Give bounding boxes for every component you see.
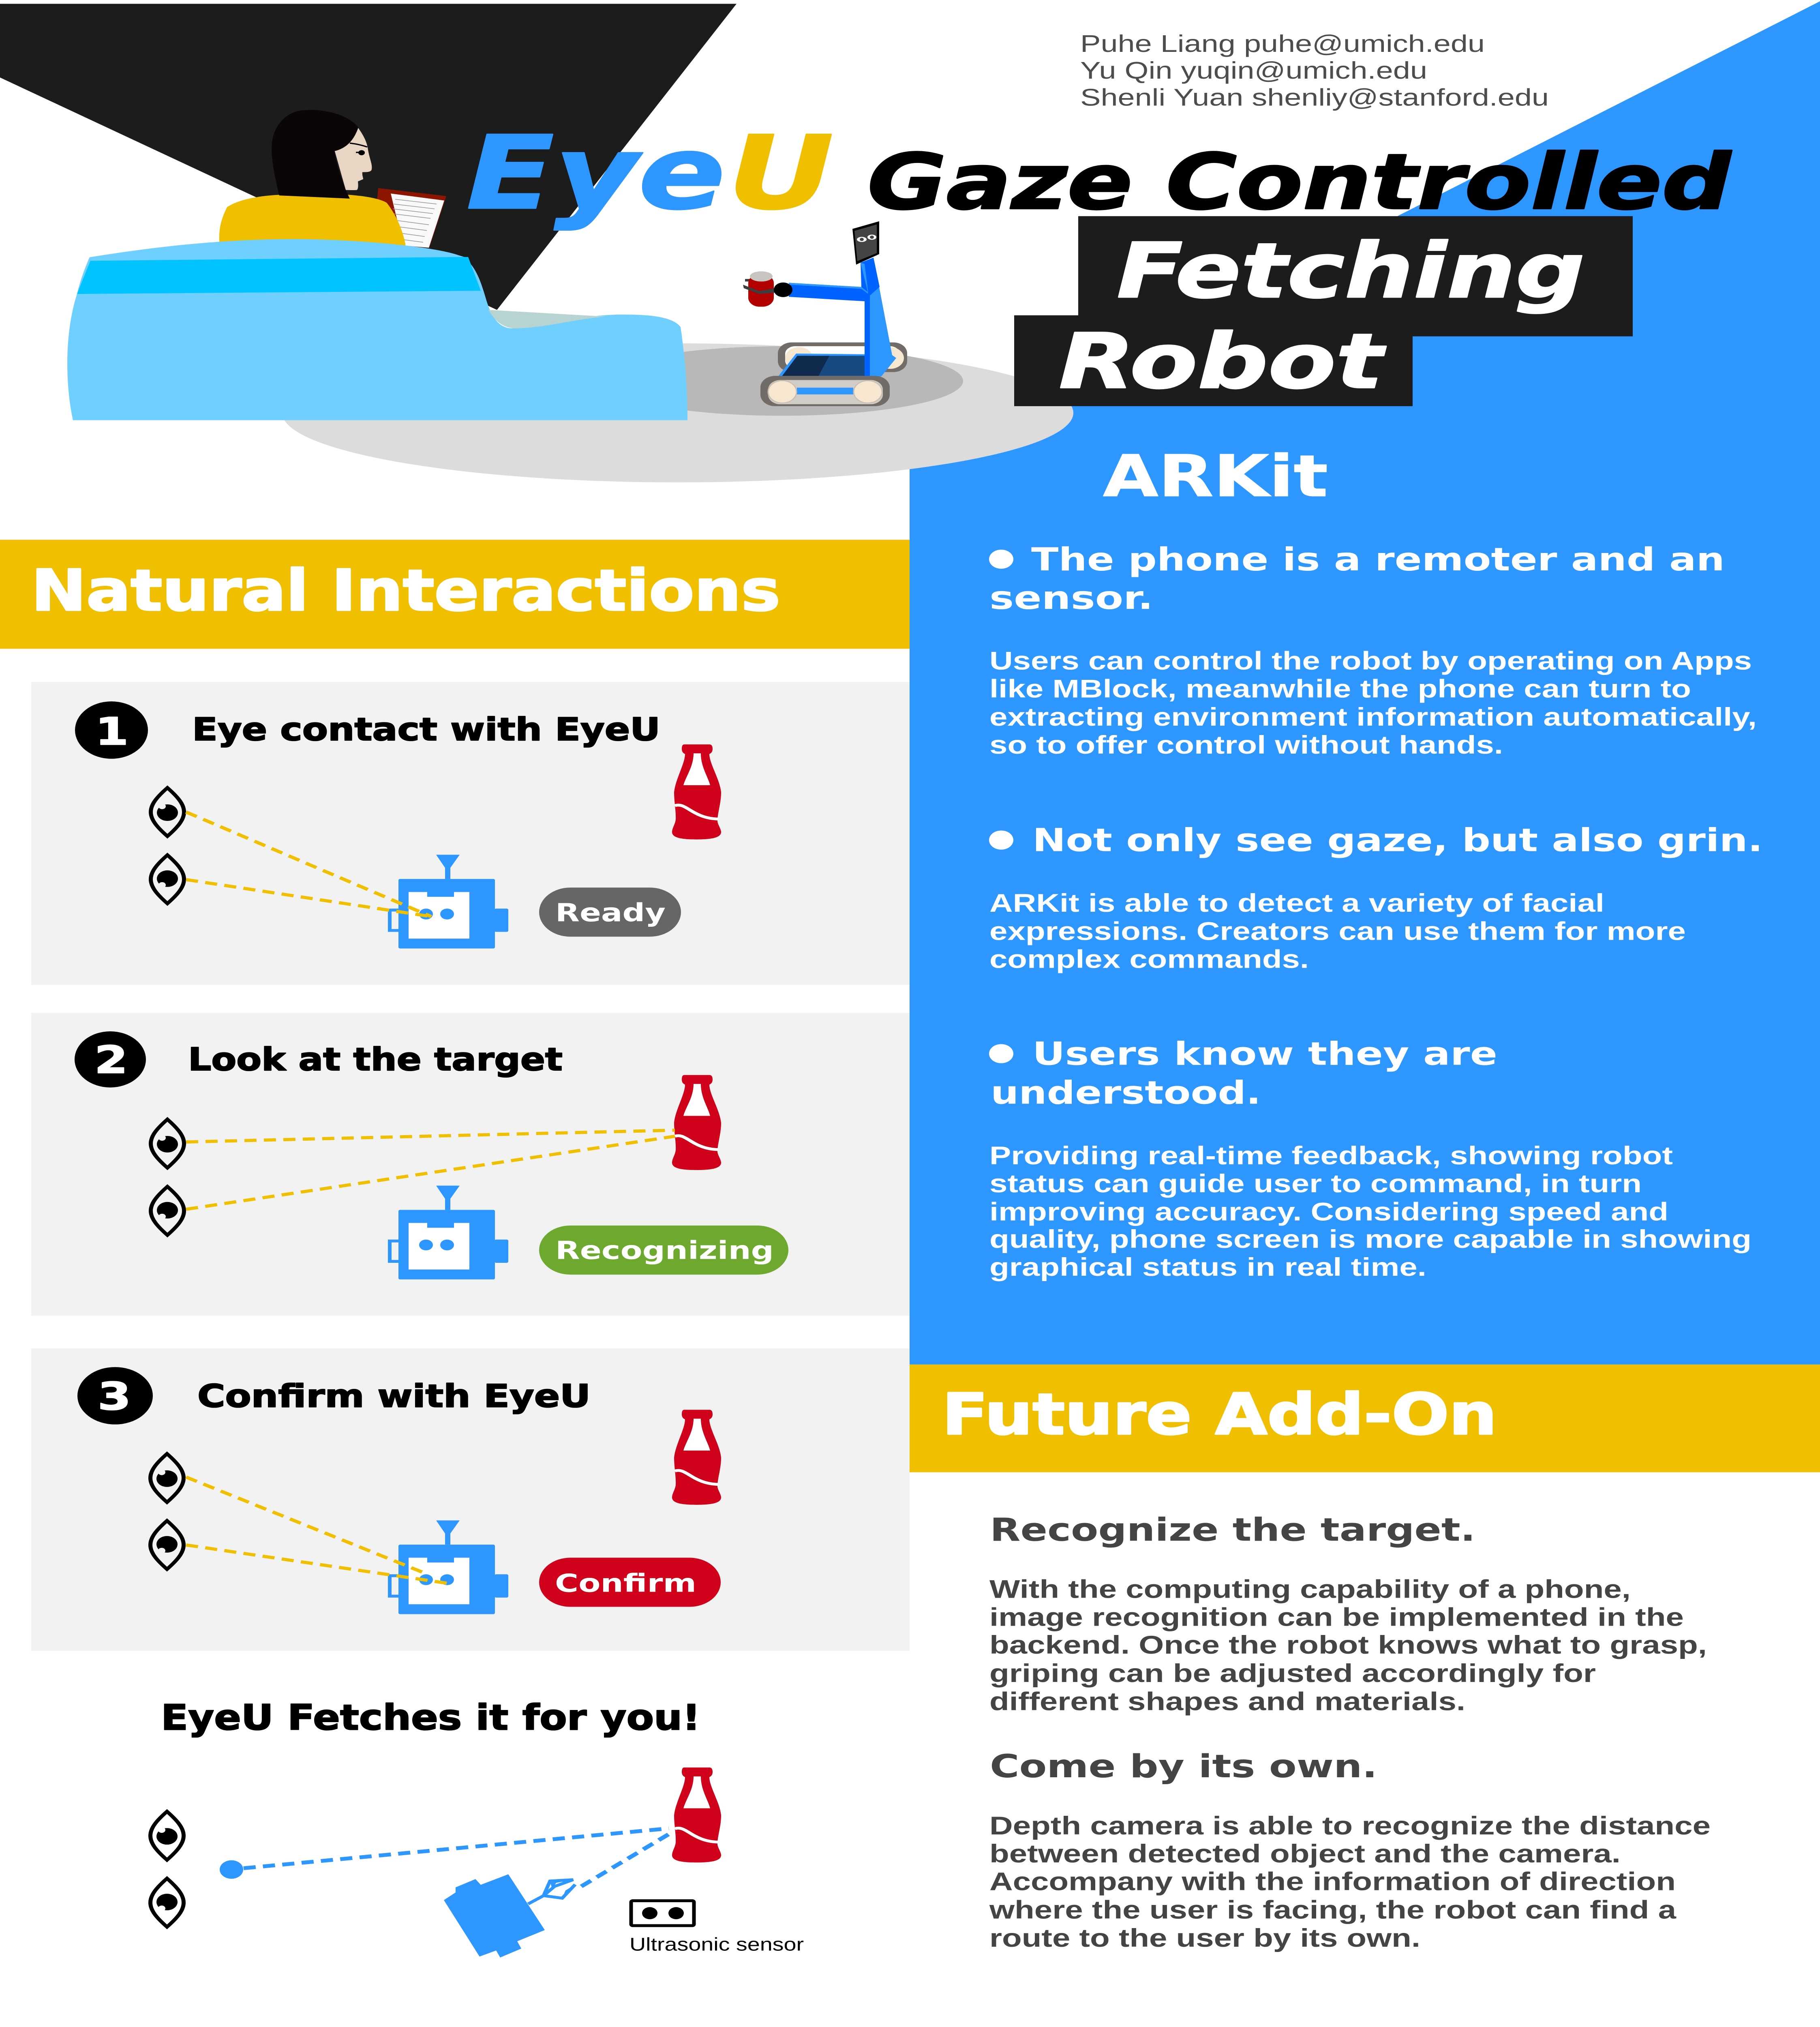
icon: bottle (672, 744, 721, 840)
step number 2 (75, 1031, 146, 1087)
icon: eyes (151, 1119, 184, 1235)
block: come by its own (989, 1748, 1711, 1952)
heading: Future Add-On: Future Add-On (942, 1381, 1497, 1447)
background: blue ARKit panel (910, 1, 1820, 1365)
authors (1080, 30, 1549, 111)
book (373, 188, 446, 248)
tray (778, 354, 865, 376)
step number 3: 3 (98, 1375, 131, 1418)
block: users understood (989, 1036, 1751, 1281)
status pill: Ready (539, 887, 681, 936)
fetch heading: EyeU Fetches it for you! (161, 1697, 700, 1738)
heading: ARKit: ARKit (1103, 443, 1328, 510)
sofa stripe (77, 257, 481, 294)
icon: ultrasonic sensor (631, 1901, 694, 1926)
block: recognize the target: Recognize the target. (990, 1512, 1475, 1549)
block: come by its own: Come by its own. (990, 1748, 1377, 1785)
block: recognize the target (989, 1512, 1707, 1716)
block: remoter and sensor: like MBlock, meanwhile the phone can turn to (989, 675, 1691, 703)
panel: step 3 (31, 1348, 910, 1651)
step number 2: 2 (94, 1038, 128, 1082)
title: Eye (466, 114, 726, 232)
icon: rotated robot (444, 1874, 575, 1958)
block: recognize the target: With the computing capability of a phone, (989, 1575, 1631, 1603)
block: come by its own: route to the user by its own. (989, 1924, 1420, 1952)
icon: robot head (388, 1186, 508, 1279)
gaze lines (186, 1130, 675, 1209)
step number 1 (75, 701, 148, 759)
block: remoter and sensor: extracting environment information automatically, (989, 703, 1757, 731)
background: black triangle (0, 4, 737, 310)
authors: Puhe Liang puhe@umich.edu (1080, 30, 1485, 57)
robot column and arm (789, 257, 896, 377)
block: remoter and sensor: The phone is a remoter and an (1031, 541, 1725, 578)
icon: eyes (151, 788, 184, 904)
block: recognize the target: backend. Once the robot knows what to grasp, (989, 1631, 1707, 1659)
status pill: Recognizing (539, 1226, 788, 1275)
icon: robot head (388, 1520, 508, 1614)
heading: Natural Interactions: Natural Interactions (31, 557, 780, 624)
sensor label: Ultrasonic sensor (630, 1934, 804, 1955)
block: come by its own: between detected object and the camera. (989, 1840, 1621, 1868)
dashed paths (244, 1828, 669, 1886)
block: users understood: improving accuracy. Considering speed and (989, 1198, 1668, 1226)
block: users understood: Providing real-time feedback, showing robot (989, 1142, 1673, 1170)
authors: Yu Qin yuqin@umich.edu (1080, 57, 1427, 84)
block: users understood: quality, phone screen is more capable in showing (989, 1225, 1751, 1253)
panel: step 2 (31, 1013, 910, 1316)
floor ellipse (282, 343, 1073, 482)
block: come by its own: Depth camera is able to recognize the distance (989, 1812, 1711, 1840)
title: Gaze Controlled (867, 137, 1732, 227)
block: remoter and sensor (989, 541, 1757, 759)
block: gaze and grin: Not only see gaze, but also grin. (1032, 822, 1763, 859)
step number 1: 1 (95, 710, 128, 754)
block: users understood: Users know they are (1032, 1036, 1497, 1073)
sweater (219, 195, 406, 249)
sofa (67, 239, 687, 420)
block: remoter and sensor: sensor. (989, 580, 1153, 617)
block: gaze and grin: expressions. Creators can use them for more (989, 917, 1686, 945)
sofa shadow (488, 310, 606, 328)
title box: Fetching: Fetching (1117, 227, 1585, 315)
block: come by its own: Accompany with the information of direction (989, 1868, 1676, 1896)
icon: eyes (150, 1811, 184, 1927)
status pill: Confirm (539, 1558, 721, 1607)
block: users understood: graphical status in real time. (989, 1253, 1426, 1281)
block: recognize the target: griping can be adjusted accordingly for (989, 1659, 1596, 1688)
block: gaze and grin (989, 822, 1763, 974)
authors: Shenli Yuan shenliy@stanford.edu (1080, 84, 1549, 111)
tablet screen (852, 221, 879, 265)
face (334, 128, 372, 190)
front track (760, 376, 890, 406)
title box: Fetching: Robot (1059, 317, 1386, 406)
block: gaze and grin: ARKit is able to detect a variety of facial (989, 889, 1604, 917)
panel: step 1 (31, 682, 910, 985)
block: users understood: understood. (991, 1075, 1261, 1112)
title (466, 114, 1732, 232)
icon: eyes (150, 1454, 184, 1569)
held can (743, 271, 792, 307)
heading: Future Add-On (910, 1365, 1820, 1472)
block: users understood: status can guide user to command, in turn (989, 1170, 1642, 1198)
step title: Confirm with EyeU (197, 1378, 591, 1415)
status pill: Ready: Ready (555, 898, 666, 928)
illustration: person on sofa (67, 110, 687, 420)
title box: Fetching (1014, 216, 1633, 406)
icon: bottle (672, 1075, 721, 1170)
status pill: Confirm: Confirm (555, 1569, 696, 1598)
gaze lines (186, 812, 431, 917)
robot shadow (602, 346, 963, 416)
section: fetch result (150, 1697, 804, 1958)
icon: robot head (388, 855, 508, 949)
block: come by its own: where the user is facing, the robot can find a (989, 1896, 1677, 1924)
block: remoter and sensor: so to offer control without hands. (989, 731, 1503, 759)
rear track (778, 343, 907, 372)
title: U (728, 114, 834, 232)
block: gaze and grin: complex commands. (989, 945, 1309, 974)
illustration: fetching robot (743, 221, 907, 406)
icon: bottle (672, 1410, 721, 1505)
heading: Natural Interactions (0, 540, 910, 649)
step number 3 (77, 1367, 153, 1425)
status pill: Recognizing: Recognizing (555, 1236, 774, 1265)
block: remoter and sensor: Users can control the robot by operating on Apps (989, 647, 1752, 675)
icon: bottle (672, 1768, 721, 1862)
block: recognize the target: image recognition can be implemented in the (989, 1603, 1684, 1632)
hair (272, 110, 358, 199)
step title: Eye contact with EyeU (192, 711, 660, 748)
step title: Look at the target (188, 1041, 563, 1078)
gaze lines (186, 1477, 447, 1583)
block: recognize the target: different shapes and materials. (989, 1687, 1465, 1716)
gaze point (220, 1860, 243, 1879)
